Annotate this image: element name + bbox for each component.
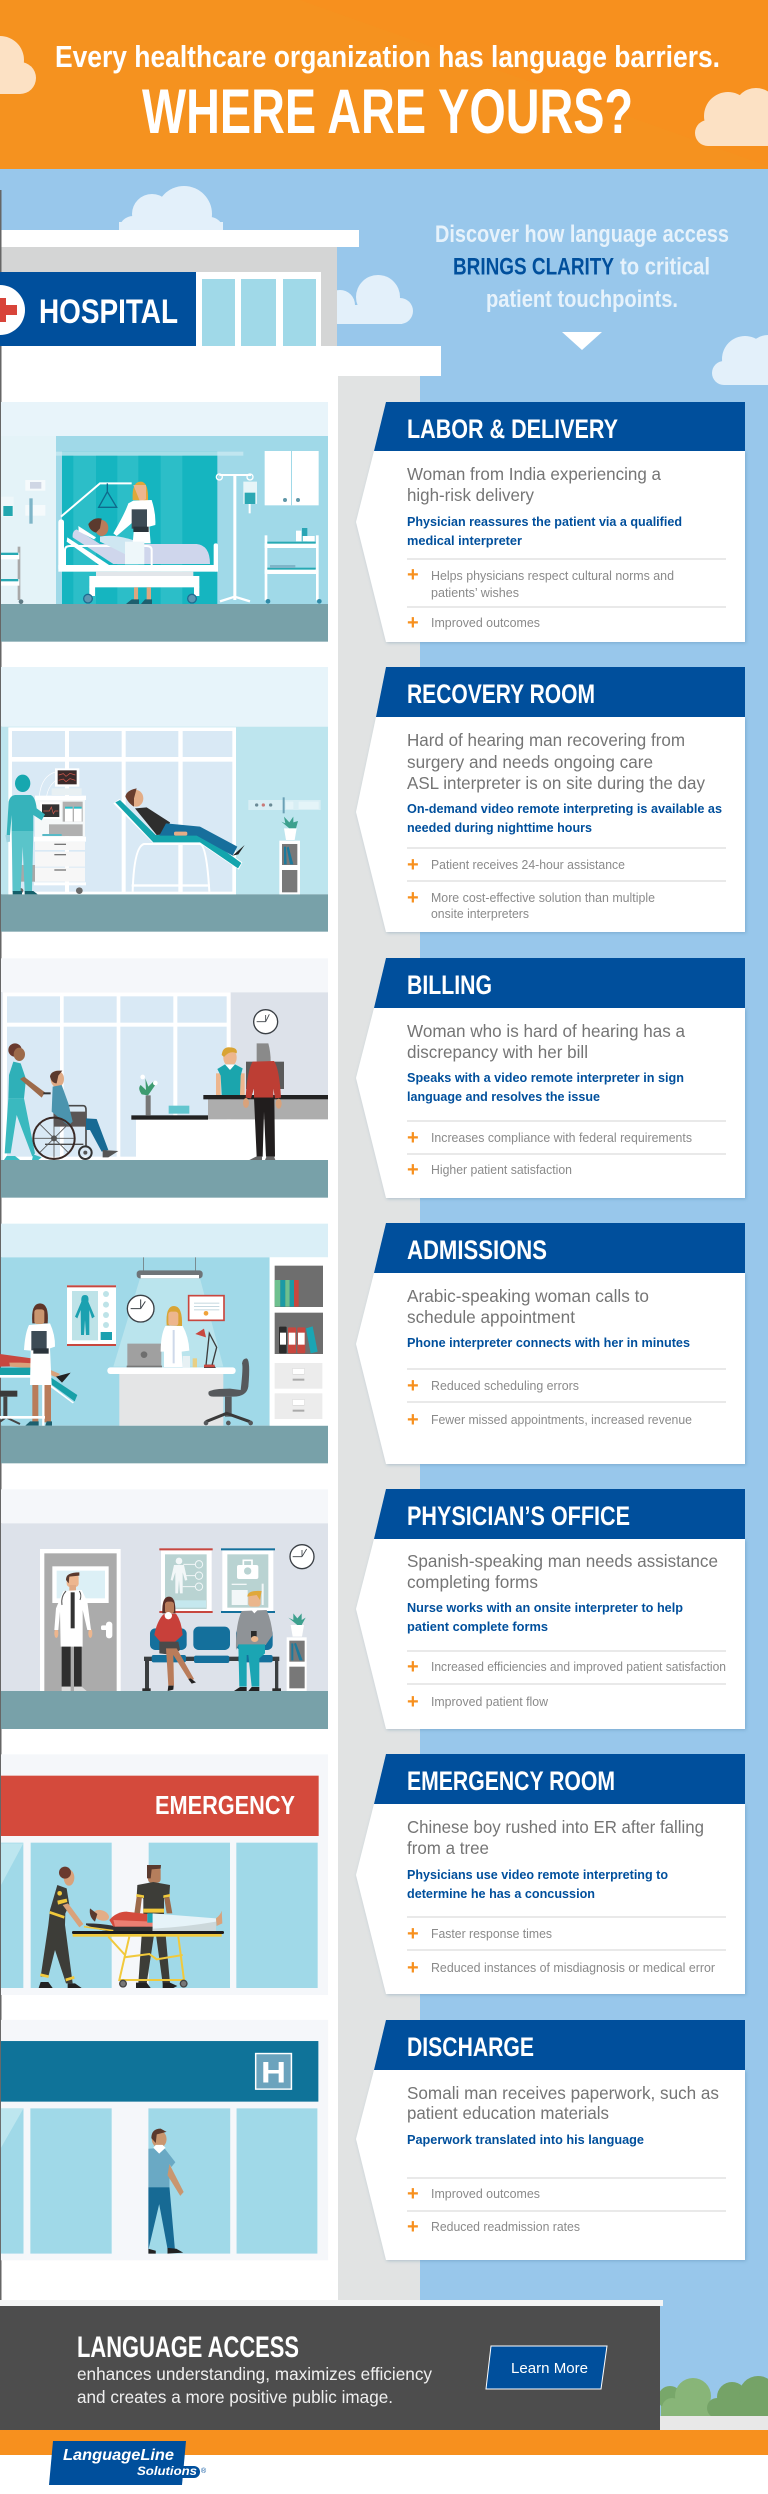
icon: cloud above roof xyxy=(119,186,223,244)
scene: physician's office xyxy=(1,1489,328,1729)
description: completing forms xyxy=(407,1572,538,1592)
panel: physician's office xyxy=(356,1489,745,1729)
icon: stretcher with patient xyxy=(72,1908,224,1987)
benefits: + xyxy=(407,887,419,909)
button: learn more: Learn More xyxy=(511,2361,588,2377)
panel: billing xyxy=(356,958,745,1198)
arrow: intro pointer xyxy=(562,332,602,350)
intro text xyxy=(435,221,729,313)
benefits: + xyxy=(407,1375,419,1397)
solution: patient complete forms xyxy=(407,1619,548,1634)
benefits xyxy=(407,559,726,634)
solution: On-demand video remote interpreting is available as xyxy=(407,801,722,816)
benefits: Reduced instances of misdiagnosis or medical error xyxy=(431,1961,715,1975)
solution xyxy=(407,1600,683,1634)
icon: ceiling lamp xyxy=(137,1257,203,1278)
hospital sign: HOSPITAL xyxy=(39,293,178,331)
description: patient education materials xyxy=(407,2103,609,2123)
benefits: Improved patient flow xyxy=(431,1695,549,1709)
icon: bed xyxy=(58,483,218,603)
footer text: enhances understanding, maximizes efficiency xyxy=(77,2364,432,2384)
icon: h sign xyxy=(256,2054,291,2089)
benefits: + xyxy=(407,1957,419,1979)
icon: doctor with clipboard xyxy=(0,1303,55,1426)
description xyxy=(407,1021,685,1062)
benefits: + xyxy=(407,1159,419,1181)
icon: exam table and patient xyxy=(0,1354,77,1424)
scene: recovery room xyxy=(1,667,328,932)
logo: ® xyxy=(201,2467,207,2475)
benefits xyxy=(407,848,726,921)
description: from a tree xyxy=(407,1838,489,1858)
icon: seated man xyxy=(234,1591,273,1691)
benefits: Improved outcomes xyxy=(431,616,540,630)
heading: EMERGENCY ROOM xyxy=(407,1766,615,1796)
desk xyxy=(107,1329,236,1426)
intro text: to critical xyxy=(620,254,710,280)
heading: RECOVERY ROOM xyxy=(407,679,595,709)
icon: clock xyxy=(127,1295,154,1322)
hospital building xyxy=(0,190,441,2306)
icon: doctor xyxy=(113,482,155,604)
icon: doctor xyxy=(54,1572,92,1691)
header banner xyxy=(0,0,768,169)
icon: cloud beside building xyxy=(325,275,413,324)
description: surgery and needs ongoing care xyxy=(407,752,653,772)
icon: cloud right xyxy=(712,335,768,385)
description xyxy=(407,464,661,505)
icon: desk chair xyxy=(204,1358,253,1425)
footer text: and creates a more positive public image. xyxy=(77,2387,393,2407)
icon: patient xyxy=(88,518,140,555)
icon: wall panel and shelf xyxy=(248,797,321,894)
scene: billing xyxy=(1,958,328,1198)
description: Woman from India experiencing a xyxy=(407,464,661,484)
reception desk xyxy=(131,1062,328,1160)
benefits xyxy=(407,1121,726,1181)
description xyxy=(407,2083,719,2123)
panel: admissions xyxy=(356,1223,745,1464)
panel: emergency room xyxy=(356,1754,745,1994)
icon: iv stand xyxy=(216,474,257,601)
solution xyxy=(407,801,722,835)
icon: physician at desk xyxy=(161,1306,189,1367)
benefits xyxy=(407,2178,726,2238)
solution: Phone interpreter connects with her in minutes xyxy=(407,1335,690,1350)
benefits: Patient receives 24-hour assistance xyxy=(431,858,625,872)
benefits: Helps physicians respect cultural norms and xyxy=(431,569,674,583)
footer heading: LANGUAGE ACCESS xyxy=(77,2331,299,2364)
icon: walking man xyxy=(148,2129,184,2254)
hospital sign xyxy=(0,272,196,346)
heading: BILLING xyxy=(407,970,492,1000)
icon: paramedic left xyxy=(39,1867,83,1988)
icon: nurse xyxy=(5,775,45,894)
icon: reclining patient xyxy=(113,788,245,892)
benefits: Reduced scheduling errors xyxy=(431,1379,579,1393)
icon: header cloud left xyxy=(0,36,36,94)
description: Hard of hearing man recovering from xyxy=(407,730,685,750)
icon: cabinet xyxy=(265,451,319,505)
benefits: Higher patient satisfaction xyxy=(431,1163,572,1177)
benefits: + xyxy=(407,1656,419,1678)
button: learn more xyxy=(486,2346,607,2389)
description: ASL interpreter is on site during the day xyxy=(407,773,705,793)
description: Spanish-speaking man needs assistance xyxy=(407,1551,718,1571)
solution xyxy=(407,1867,668,1901)
benefits: More cost-effective solution than multiple xyxy=(431,891,655,905)
benefits: + xyxy=(407,1127,419,1149)
description: discrepancy with her bill xyxy=(407,1042,588,1062)
benefits: + xyxy=(407,2216,419,2238)
benefits xyxy=(407,1917,726,1979)
solution: Nurse works with an onsite interpreter to help xyxy=(407,1600,683,1615)
icon: anatomy poster xyxy=(67,1285,116,1346)
solution: Physician reassures the patient via a qualified xyxy=(407,514,682,529)
description: schedule appointment xyxy=(407,1307,575,1327)
icon: shelves xyxy=(270,1257,328,1426)
solution: determine he has a concussion xyxy=(407,1886,595,1901)
icon: patient at desk xyxy=(243,1043,282,1160)
benefits xyxy=(407,1369,726,1431)
solution: language and resolves the issue xyxy=(407,1089,600,1104)
intro text: BRINGS CLARITY xyxy=(453,254,614,280)
panel: discharge xyxy=(356,2020,745,2260)
icon: paramedic right xyxy=(134,1865,177,1988)
benefits: + xyxy=(407,854,419,876)
logo: Solutions xyxy=(137,2464,197,2478)
description xyxy=(407,1551,718,1592)
description: Chinese boy rushed into ER after falling xyxy=(407,1817,704,1837)
icon: door xyxy=(40,1549,121,1691)
scene: emergency room xyxy=(1,1754,328,1995)
description xyxy=(407,1817,704,1858)
benefits: Fewer missed appointments, increased revenue xyxy=(431,1413,692,1427)
solution xyxy=(407,1070,684,1104)
icon: plant and shelf xyxy=(287,1613,307,1691)
description: Somali man receives paperwork, such as xyxy=(407,2083,719,2103)
solution: medical interpreter xyxy=(407,533,522,548)
solution: Physicians use video remote interpreting to xyxy=(407,1867,668,1882)
benefits: + xyxy=(407,2183,419,2205)
benefits: Faster response times xyxy=(431,1927,552,1941)
description xyxy=(407,1286,649,1327)
benefits: Reduced readmission rates xyxy=(431,2220,580,2234)
benefits: + xyxy=(407,1409,419,1431)
heading: DISCHARGE xyxy=(407,2032,534,2062)
section sign text: EMERGENCY xyxy=(155,1790,295,1820)
orange base band xyxy=(0,2430,768,2455)
heading: LABOR & DELIVERY xyxy=(407,414,618,444)
icon: bench xyxy=(142,1627,281,1691)
benefits xyxy=(407,1651,726,1713)
solution: needed during nighttime hours xyxy=(407,820,592,835)
intro text: patient touchpoints. xyxy=(486,286,678,313)
description: high-risk delivery xyxy=(407,485,534,505)
benefits: Increases compliance with federal requirements xyxy=(431,1131,692,1145)
h sign letter: H xyxy=(261,2056,286,2090)
scene: discharge xyxy=(1,2020,328,2260)
description: Arabic-speaking woman calls to xyxy=(407,1286,649,1306)
trees xyxy=(658,2376,768,2430)
benefits: patients’ wishes xyxy=(431,586,519,600)
logo xyxy=(49,2441,207,2485)
icon: nurse with wheelchair xyxy=(4,1043,118,1160)
solution xyxy=(407,514,682,548)
panel: recovery room xyxy=(356,667,745,932)
icon: posters xyxy=(159,1548,275,1613)
benefits: + xyxy=(407,612,419,634)
benefits: Increased efficiencies and improved patient satisfaction xyxy=(431,1660,726,1674)
logo: LanguageLine xyxy=(63,2447,174,2464)
description xyxy=(407,730,705,793)
solution: Speaks with a video remote interpreter in sign xyxy=(407,1070,684,1085)
panel: labor and delivery xyxy=(356,402,745,642)
benefits: Improved outcomes xyxy=(431,2187,540,2201)
icon: seated woman xyxy=(154,1597,196,1691)
icon: clock xyxy=(290,1545,314,1569)
scene: admissions xyxy=(0,1224,328,1463)
heading: PHYSICIAN’S OFFICE xyxy=(407,1501,630,1531)
footer band xyxy=(0,2300,663,2430)
benefits: + xyxy=(407,1923,419,1945)
icon: receptionist xyxy=(216,1047,245,1095)
icon: cart xyxy=(265,528,322,604)
scene: labor and delivery xyxy=(1,402,328,642)
benefits: + xyxy=(407,564,419,586)
description: Woman who is hard of hearing has a xyxy=(407,1021,685,1041)
benefits: + xyxy=(407,1691,419,1713)
benefits: onsite interpreters xyxy=(431,907,529,921)
footer text xyxy=(77,2364,432,2407)
icon: clock xyxy=(254,1010,278,1034)
icon: diploma xyxy=(189,1296,224,1320)
solution: Paperwork translated into his language xyxy=(407,2132,644,2147)
icon: monitor cart xyxy=(18,768,86,894)
icon: header cloud right xyxy=(695,88,768,146)
heading: ADMISSIONS xyxy=(407,1235,547,1265)
